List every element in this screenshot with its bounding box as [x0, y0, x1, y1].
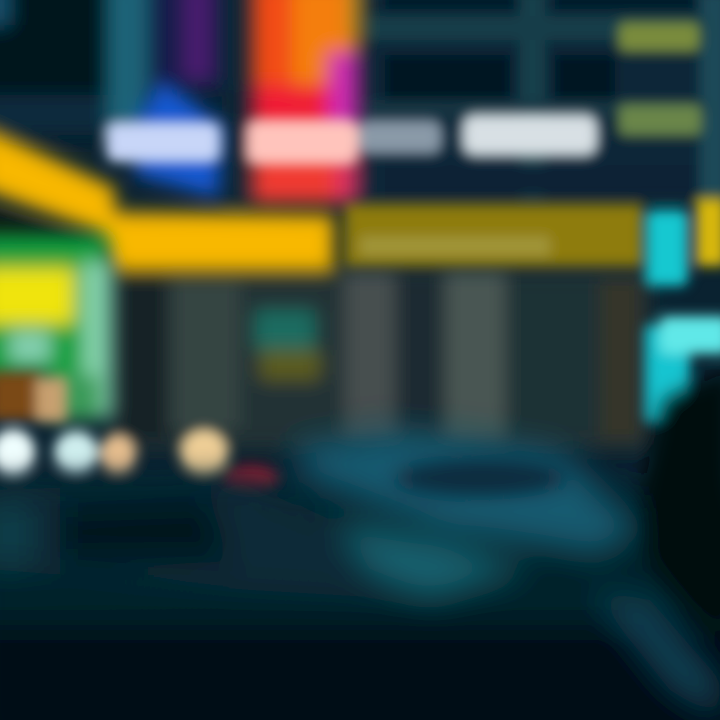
storefront band: [110, 270, 650, 450]
dark foreground silhouette: [645, 370, 720, 640]
car body: [0, 490, 720, 720]
cyan sign: [646, 198, 720, 423]
white sign lettering: [106, 114, 598, 164]
green shop front: [0, 235, 112, 420]
car roof highlights: [0, 430, 720, 720]
dark roof window: [395, 460, 565, 496]
blue sign: [135, 80, 222, 198]
yellow awning: [0, 125, 334, 272]
brown shop counter: [0, 372, 66, 422]
street lights: [0, 429, 278, 491]
olive awning: [345, 204, 643, 266]
orange and red banner: [252, 0, 362, 203]
upper-left building: [0, 0, 255, 210]
dark awning shadow: [0, 205, 110, 262]
olive signage blobs: [618, 22, 702, 136]
upper-right building with windows: [360, 0, 720, 200]
